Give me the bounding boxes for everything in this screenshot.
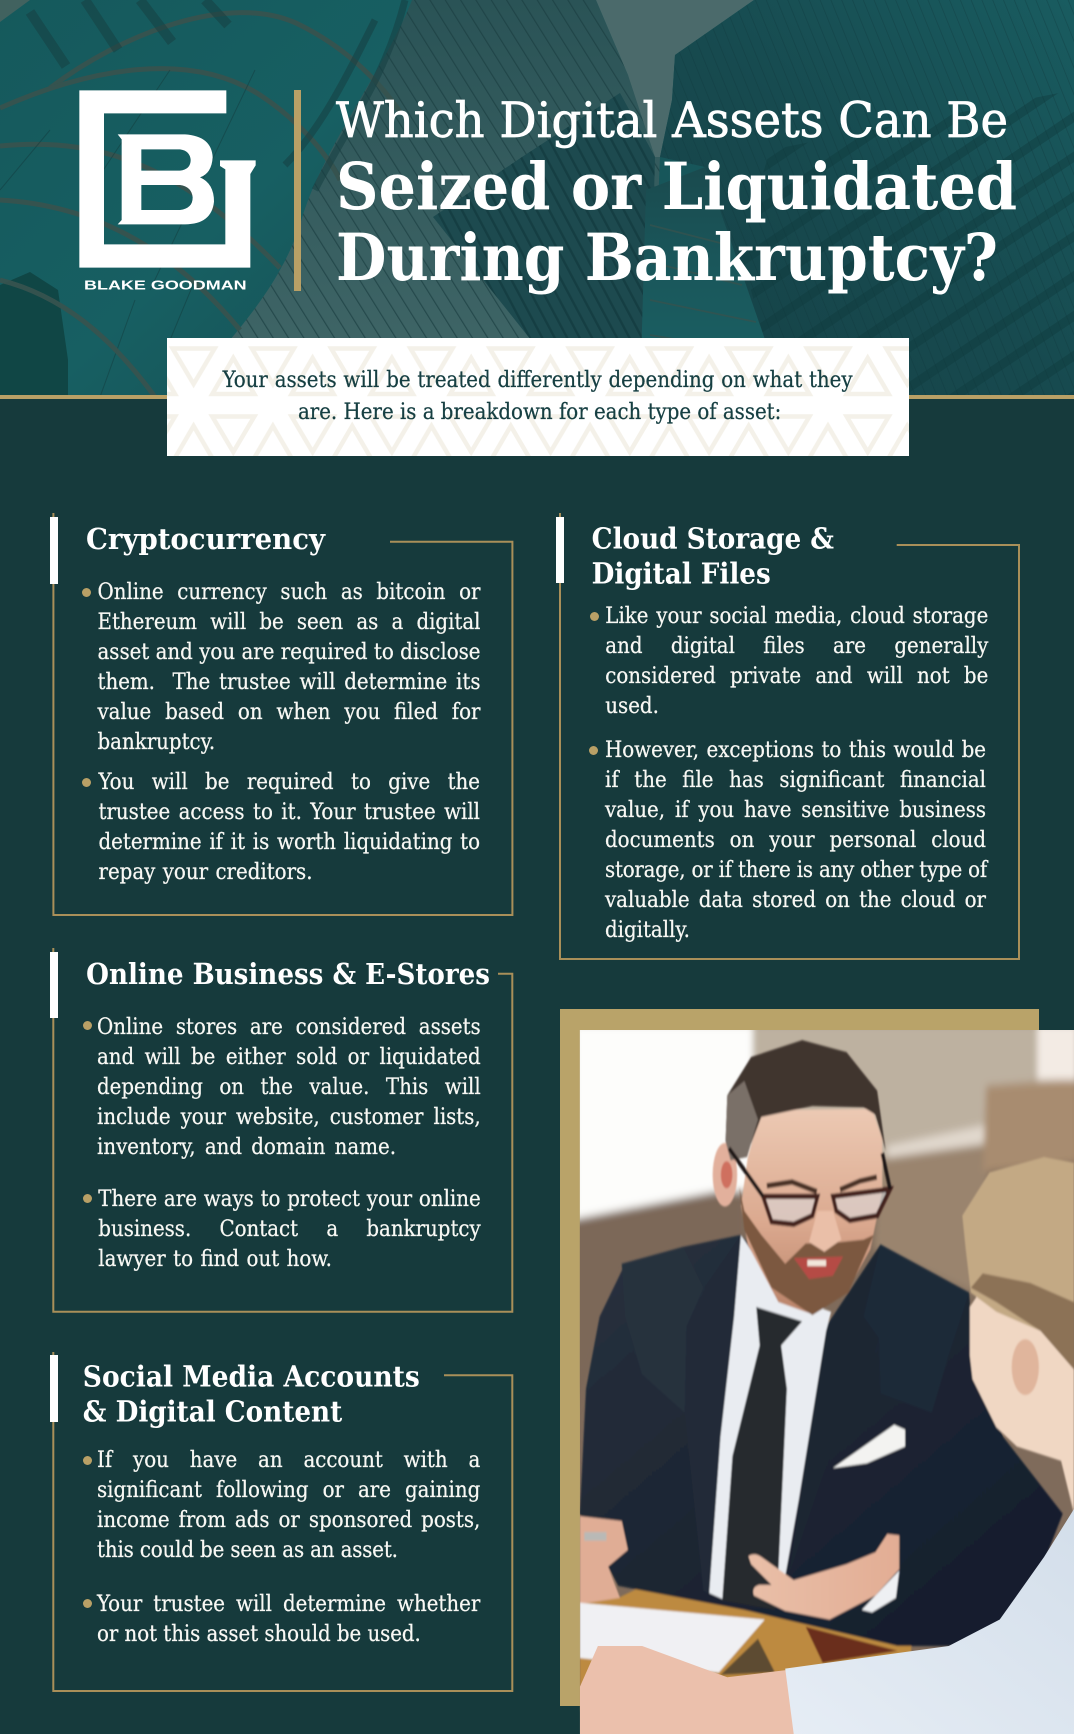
text block: You will be required to give the [98, 770, 480, 795]
shirt cuff [862, 1571, 899, 1612]
text block: determine if it is worth liquidating to [98, 830, 480, 855]
text block: them. The trustee will determine its [98, 670, 480, 695]
ear [713, 1143, 737, 1206]
intro callout [167, 338, 909, 456]
panel: cloud storage [556, 513, 1020, 960]
jacket [580, 1235, 1063, 1646]
panel: cryptocurrency [50, 513, 514, 916]
title: During Bankruptcy? [336, 220, 998, 296]
text block: value, if you have sensitive business [605, 798, 986, 823]
text block: considered private and will not be [605, 664, 988, 689]
text block: valuable data stored on the cloud or [605, 888, 986, 913]
text block [98, 770, 480, 885]
text block: if the file has significant financial [605, 768, 986, 793]
heading: Cloud Storage & [592, 521, 834, 555]
text block [604, 738, 988, 943]
text block: asset and you are required to disclose [98, 640, 480, 665]
text block: or not this asset should be used. [97, 1622, 421, 1647]
paper [580, 1603, 765, 1672]
text block: income from ads or sponsored posts, [97, 1508, 480, 1533]
text block: used. [605, 694, 659, 719]
text block: value based on when you filed for [98, 700, 480, 725]
text block: and digital files are generally [605, 634, 988, 659]
nose [809, 1211, 841, 1252]
header background: skyscrapers photo [0, 0, 1074, 395]
text block: There are ways to protect your online [98, 1187, 481, 1212]
text block: Your trustee will determine whether [97, 1592, 480, 1617]
logo: Blake Goodman [79, 90, 256, 293]
panel: social media [50, 1352, 514, 1692]
text block [97, 1015, 481, 1160]
text block: trustee access to it. Your trustee will [98, 800, 480, 825]
client arm [580, 1646, 799, 1734]
heading: Social Media Accounts [83, 1360, 420, 1394]
text block: Ethereum will be seen as a digital [98, 610, 480, 635]
heading [592, 521, 834, 590]
text block: inventory, and domain name. [97, 1135, 396, 1160]
text block [97, 580, 481, 755]
title: Which Digital Assets Can Be [336, 92, 1008, 149]
text block: repay your creditors. [98, 860, 312, 885]
eyebrows [767, 1177, 877, 1192]
text block [97, 1448, 480, 1563]
heading [83, 1360, 420, 1429]
heading: & Digital Content [83, 1395, 342, 1429]
text block: include your website, customer lists, [97, 1105, 481, 1130]
text block: If you have an account with a [97, 1448, 480, 1473]
text block: and will be either sold or liquidated [97, 1045, 481, 1070]
pocket square [833, 1425, 905, 1468]
gold divider line [0, 395, 1074, 399]
shirt [709, 1235, 831, 1600]
logo: Blake Goodman: BLAKE GOODMAN [84, 278, 247, 293]
text block: Online currency such as bitcoin or [98, 580, 480, 605]
glasses [763, 1189, 890, 1224]
text block: However, exceptions to this would be [605, 738, 986, 763]
table [580, 1581, 911, 1711]
intro callout: are. Here is a breakdown for each type of asset: [298, 400, 781, 425]
gold vertical divider [294, 90, 301, 291]
text block: documents on your personal cloud [605, 828, 986, 853]
text block: lawyer to find out how. [98, 1247, 332, 1272]
client hair [962, 1156, 1074, 1330]
gesturing hand [748, 1534, 899, 1620]
heading: Online Business & E-Stores [86, 957, 490, 991]
beard [739, 1187, 874, 1315]
gold photo frame [560, 1009, 1039, 1706]
intro callout: Your assets will be treated differently depending on what they [223, 368, 853, 393]
text block: business. Contact a bankruptcy [98, 1217, 481, 1242]
text block: Like your social media, cloud storage [605, 604, 988, 629]
text block [96, 1592, 480, 1647]
photo: lawyer meeting with client [580, 1030, 1074, 1734]
panel: online business [50, 948, 514, 1313]
heading: Cryptocurrency [86, 522, 326, 556]
text block [605, 604, 988, 719]
text block: storage, or if there is any other type of [605, 858, 987, 883]
hair [726, 1040, 886, 1160]
text block: significant following or are gaining [97, 1478, 480, 1503]
text block: digitally. [605, 918, 690, 943]
text block: this could be seen as an asset. [97, 1538, 398, 1563]
heading: Digital Files [592, 556, 771, 590]
text block [98, 1187, 481, 1272]
tie [722, 1307, 802, 1610]
client face [970, 1293, 1074, 1514]
text block: Online stores are considered assets [97, 1015, 481, 1040]
left hand [580, 1516, 628, 1604]
text block: bankruptcy. [98, 730, 215, 755]
title: Seized or Liquidated [336, 149, 1017, 225]
face [741, 1109, 882, 1314]
client sleeve [785, 1509, 1074, 1734]
title [336, 92, 1017, 296]
text block: depending on the value. This will [97, 1075, 481, 1100]
